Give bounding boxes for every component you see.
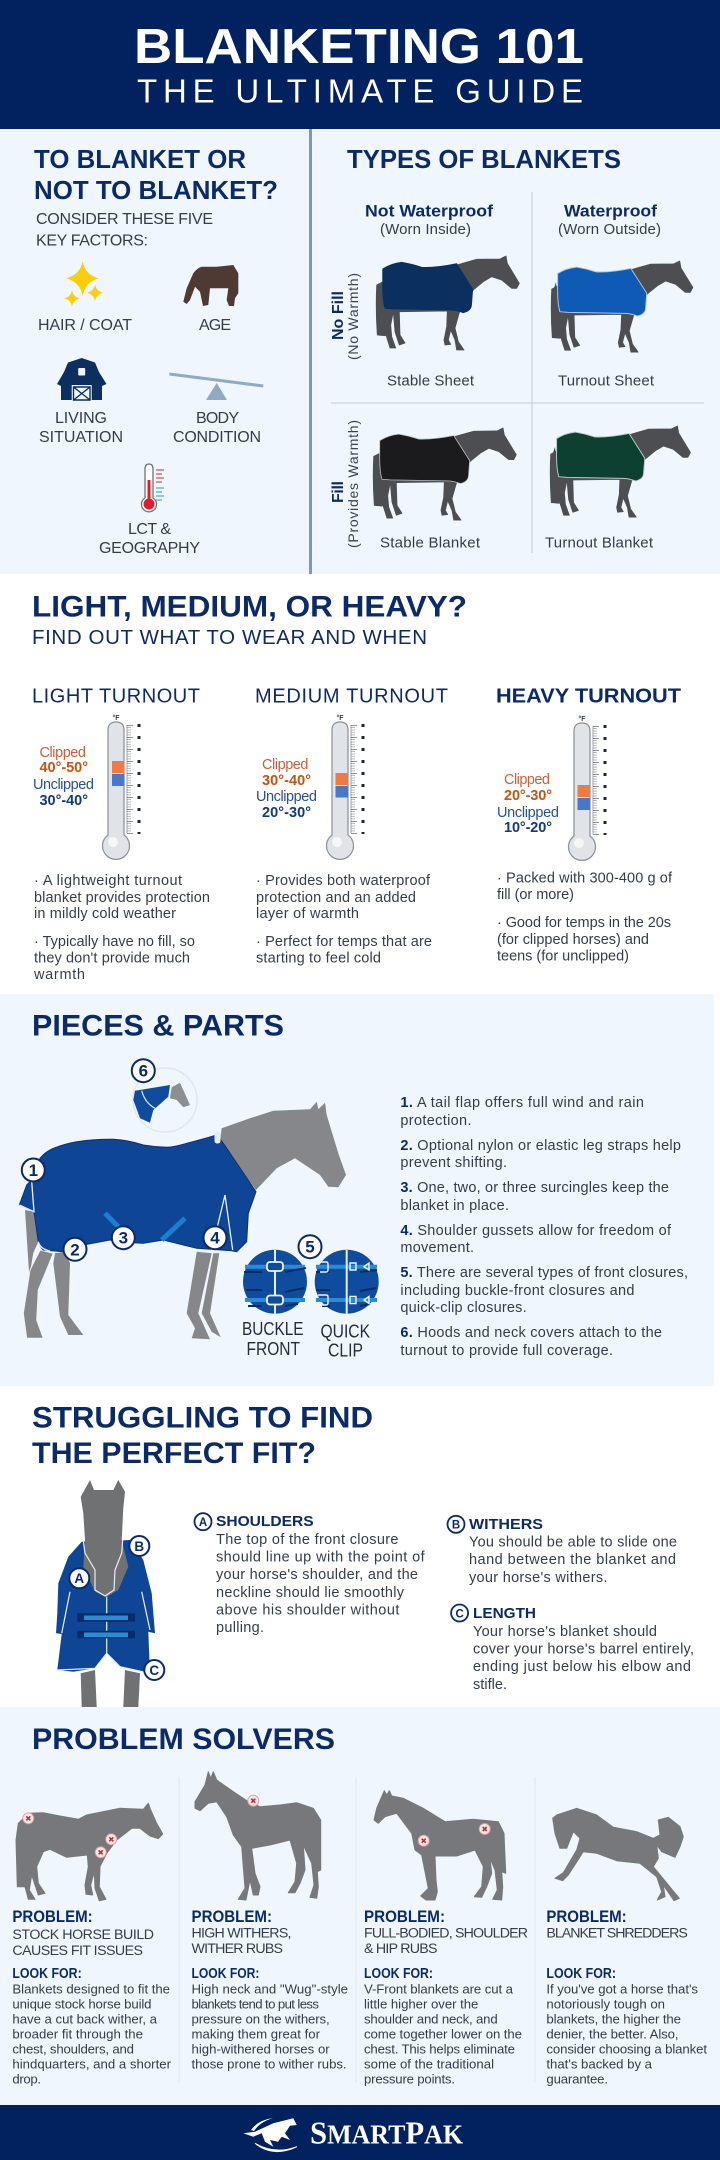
parts list: movement. xyxy=(400,1240,474,1256)
problem: high withers: High neck and "Wug"-style xyxy=(192,1981,348,1996)
fit tip: shoulders: A xyxy=(199,1517,207,1529)
column: heavy turnout: HEAVY TURNOUT xyxy=(496,686,681,708)
column label: waterproof xyxy=(558,202,661,238)
problem: stock horse build: LOOK FOR: xyxy=(12,1966,82,1982)
heading: to blanket or not to blanket: NOT TO BLANKET? xyxy=(34,175,278,205)
problem: blanket shredders: BLANKET SHREDDERS xyxy=(546,1926,688,1942)
problem: high withers: LOOK FOR: xyxy=(192,1966,259,1982)
thermometer: medium xyxy=(326,714,363,859)
problem: full-bodied: come together lower on the xyxy=(364,2026,522,2041)
column: medium turnout xyxy=(255,686,448,967)
horse front view xyxy=(56,1480,155,1707)
callout digits: 5 xyxy=(305,1238,315,1257)
factor: LCT and geography xyxy=(99,464,200,557)
horse: green blanket xyxy=(550,426,690,517)
horse silhouette: stock horse with markers xyxy=(16,1803,163,1901)
notes: heavy: fill (or more) xyxy=(497,887,574,903)
notes: medium: starting to feel cold xyxy=(256,951,381,967)
notes: light: they don't provide much xyxy=(34,951,190,967)
temperatures: light: Unclipped xyxy=(33,777,94,793)
problem: stock horse build xyxy=(12,1803,172,2086)
problem: stock horse build: STOCK HORSE BUILD xyxy=(12,1927,154,1943)
closure: buckle front xyxy=(242,1250,307,1359)
hood inset xyxy=(133,1068,197,1132)
temperatures: medium: Unclipped xyxy=(256,789,317,805)
parts list: 3. One, two, or three surcingles keep the xyxy=(400,1180,669,1196)
closure: buckle front: BUCKLE xyxy=(242,1319,304,1339)
heading: light medium heavy xyxy=(32,590,467,649)
problem: blanket shredders: blankets, the higher the xyxy=(546,2011,681,2026)
callout letters on horse: B xyxy=(134,1539,144,1554)
fit tip: length xyxy=(451,1604,694,1693)
notes: heavy xyxy=(497,871,673,965)
parts list: 2. Optional nylon or elastic leg straps help xyxy=(400,1138,681,1154)
fit tip: shoulders xyxy=(194,1513,426,1636)
title: BLANKETING 101 xyxy=(134,20,584,74)
heading: to blanket or not to blanket xyxy=(34,144,278,205)
turnout sheet: Turnout Sheet xyxy=(558,372,655,390)
panel: problem solvers xyxy=(0,1707,720,2105)
fit tip: withers xyxy=(448,1516,677,1586)
horse: blue sheet xyxy=(551,261,693,352)
fit tip: shoulders: neckline should lie smoothly xyxy=(216,1585,405,1601)
panel: types of blankets xyxy=(309,129,720,574)
factor: age xyxy=(183,265,238,334)
notes: heavy: (for clipped horses) and xyxy=(497,932,649,948)
fit tip: length: stifle. xyxy=(473,1677,507,1693)
heading: struggling to find the perfect fit: STRUGGLING TO FIND xyxy=(32,1402,373,1434)
problem: high withers: making them great for xyxy=(192,2026,321,2041)
fit tip: withers: B xyxy=(452,1520,460,1532)
problem: stock horse build: have a cut back wither, a xyxy=(12,2011,158,2026)
row label: fill: Fill xyxy=(330,481,347,503)
callout digits: 3 xyxy=(119,1229,128,1248)
temperatures: medium: 30°-40° xyxy=(262,773,311,789)
temperatures: light: 40°-50° xyxy=(40,760,88,776)
logo: wordmark: SMARTPAK xyxy=(310,2114,463,2150)
subtitle: THE ULTIMATE GUIDE xyxy=(137,72,583,110)
column: light turnout xyxy=(32,686,210,983)
horse silhouette: full-bodied with markers xyxy=(374,1791,506,1900)
fit tip: withers: You should be able to slide one xyxy=(469,1535,677,1551)
temperatures: heavy: Unclipped xyxy=(497,805,559,821)
heading: light medium heavy: LIGHT, MEDIUM, OR HEAVY? xyxy=(32,590,467,624)
temperatures: heavy xyxy=(497,772,559,836)
horse silhouette: high withers with marker xyxy=(195,1772,321,1900)
icon: grazing horse xyxy=(183,265,238,306)
fit tip: withers: your horse's withers. xyxy=(469,1570,607,1586)
notes: light: in mildly cold weather xyxy=(34,906,176,922)
callout digits: 2 xyxy=(70,1240,80,1259)
panel: pieces and parts xyxy=(0,994,714,1386)
problem: full-bodied xyxy=(364,1791,528,2086)
fit tip: length: cover your horse's barrel entirely, xyxy=(473,1642,694,1658)
fit tip: shoulders: above his shoulder without xyxy=(216,1603,399,1619)
temperatures: heavy: 20°-30° xyxy=(504,788,552,804)
row label: fill xyxy=(330,420,361,548)
stable sheet: Stable Sheet xyxy=(387,372,475,390)
closure: quick clip xyxy=(315,1250,379,1361)
parts list: prevent shifting. xyxy=(400,1155,507,1171)
factor: hair and coat xyxy=(38,261,132,334)
parts list: 1. A tail flap offers full wind and rain xyxy=(400,1095,644,1111)
problem: stock horse build: PROBLEM: xyxy=(12,1908,93,1926)
temperatures: heavy: Clipped xyxy=(504,772,550,788)
closure: buckle front: FRONT xyxy=(246,1339,300,1359)
problem: stock horse build: drop. xyxy=(12,2071,41,2086)
problem: full-bodied: V-Front blankets are cut a xyxy=(364,1981,514,1996)
panel: perfect fit xyxy=(0,1386,720,1707)
factor: LCT and geography: GEOGRAPHY xyxy=(99,540,200,557)
horse diagram with turnout xyxy=(19,1068,346,1339)
thermometer: heavy: °F xyxy=(578,715,586,723)
parts list: 5. There are several types of front closures, xyxy=(400,1265,688,1281)
stable blanket: Stable Blanket xyxy=(380,534,481,552)
problem: full-bodied: LOOK FOR: xyxy=(364,1966,433,1982)
horse legs xyxy=(81,1670,140,1707)
heading: pieces and parts: PIECES & PARTS xyxy=(32,1010,284,1042)
blanket body xyxy=(19,1135,256,1252)
heading: struggling to find the perfect fit xyxy=(32,1402,373,1470)
temperatures: light: 30°-40° xyxy=(40,793,88,809)
notes: heavy: · Good for temps in the 20s xyxy=(497,915,671,931)
fit tip: length: LENGTH xyxy=(473,1605,536,1622)
panel: light medium or heavy xyxy=(0,574,720,994)
callout digits: 6 xyxy=(139,1062,148,1081)
parts list: protection. xyxy=(400,1113,472,1129)
turnout blanket: Turnout Blanket xyxy=(545,534,654,552)
icon: barn xyxy=(57,358,106,400)
notes: medium: layer of warmth xyxy=(256,906,359,922)
fit tip: shoulders: pulling. xyxy=(216,1620,264,1636)
row label: fill: (Provides Warmth) xyxy=(345,420,361,548)
notes: medium xyxy=(256,873,432,967)
icon: thermometer xyxy=(142,464,164,512)
fit tip: shoulders: your horse's shoulder, and the xyxy=(216,1567,418,1583)
factor: age: AGE xyxy=(199,317,231,334)
fit tip: shoulders: SHOULDERS xyxy=(216,1513,314,1530)
notes: heavy: teens (for unclipped) xyxy=(497,949,629,965)
fit tip: withers: hand between the blanket and xyxy=(469,1552,676,1568)
turnout sheet xyxy=(551,261,693,390)
footer xyxy=(0,2105,720,2160)
column: light turnout: LIGHT TURNOUT xyxy=(32,686,200,708)
stable blanket xyxy=(373,428,516,552)
stable sheet xyxy=(376,256,519,390)
turnout blanket xyxy=(545,426,690,552)
subheading: five key factors: KEY FACTORS: xyxy=(36,232,148,250)
fit tip: length: C xyxy=(455,1608,464,1620)
problem: full-bodied: PROBLEM: xyxy=(364,1908,445,1926)
header banner xyxy=(0,0,720,129)
problem: full-bodied: some of the traditional xyxy=(364,2056,494,2071)
horse silhouette: bucking horse xyxy=(553,1808,683,1901)
subheading: five key factors xyxy=(36,211,213,250)
problem: blanket shredders: that's backed by a xyxy=(546,2056,653,2071)
temperatures: medium xyxy=(256,757,317,821)
problem: high withers: blankets tend to put less xyxy=(192,1996,319,2011)
temperatures: light xyxy=(33,745,94,809)
row label: no fill xyxy=(330,273,361,360)
parts list: blanket in place. xyxy=(400,1198,509,1214)
factor: body condition: BODY xyxy=(196,410,239,427)
factor: living situation: LIVING xyxy=(55,410,107,427)
factor: body condition xyxy=(169,374,263,446)
fit tip: length: ending just below his elbow and xyxy=(473,1659,691,1675)
horse legs and head xyxy=(23,1102,346,1339)
callout letters on horse: C xyxy=(149,1663,159,1678)
parts list: 4. Shoulder gussets allow for freedom of xyxy=(400,1223,672,1239)
problem: blanket shredders: PROBLEM: xyxy=(546,1908,627,1926)
callout digits xyxy=(29,1062,315,1259)
factor: living situation: SITUATION xyxy=(39,429,123,446)
fit tip: withers: WITHERS xyxy=(469,1516,543,1533)
callout digits: 1 xyxy=(29,1161,38,1180)
blanket front xyxy=(56,1540,155,1673)
heading: light medium heavy: FIND OUT WHAT TO WEAR AND WHEN xyxy=(32,626,427,649)
problem: full-bodied: pressure points. xyxy=(364,2071,455,2086)
problem: full-bodied: chest. This helps eliminate xyxy=(364,2041,515,2056)
column: medium turnout: MEDIUM TURNOUT xyxy=(255,686,448,708)
temperatures: medium: 20°-30° xyxy=(262,805,311,821)
heading: struggling to find the perfect fit: THE PERFECT FIT? xyxy=(32,1437,316,1470)
problem: high withers: HIGH WITHERS, xyxy=(192,1926,292,1942)
fit tip: shoulders: should line up with the point of xyxy=(216,1550,426,1566)
subheading: five key factors: CONSIDER THESE FIVE xyxy=(36,211,213,228)
factor: LCT and geography: LCT & xyxy=(128,521,171,538)
heading: to blanket or not to blanket: TO BLANKET OR xyxy=(34,144,246,174)
parts list: 6. Hoods and neck covers attach to the xyxy=(400,1325,662,1341)
problem: stock horse build: chest, shoulders, and xyxy=(12,2041,134,2056)
notes: light: warmth xyxy=(33,967,85,983)
notes: medium: · Perfect for temps that are xyxy=(256,934,432,950)
heading: problem solvers: PROBLEM SOLVERS xyxy=(32,1723,335,1756)
problem: full-bodied: shoulder and neck, and xyxy=(364,2011,498,2026)
icon: sparkles xyxy=(64,261,103,307)
column label: not waterproof: (Worn Inside) xyxy=(380,221,471,238)
callout letters on horse: A xyxy=(74,1571,84,1586)
horse head xyxy=(81,1480,128,1597)
factor: body condition: CONDITION xyxy=(173,429,261,446)
problem: full-bodied: & HIP RUBS xyxy=(364,1941,438,1957)
icon: seesaw xyxy=(169,374,263,400)
temperatures: medium: Clipped xyxy=(262,757,308,773)
temperatures: light: Clipped xyxy=(40,745,86,761)
parts list xyxy=(400,1095,688,1359)
problem: full-bodied: FULL-BODIED, SHOULDER xyxy=(364,1926,528,1942)
problem: blanket shredders: consider choosing a blanket xyxy=(546,2041,707,2056)
notes: light: blanket provides protection xyxy=(34,890,210,906)
closure: quick clip: CLIP xyxy=(328,1341,363,1361)
thermometer: light xyxy=(102,714,139,859)
problem: blanket shredders: If you've got a horse that's xyxy=(546,1981,698,1996)
notes: medium: protection and an added xyxy=(256,890,416,906)
problem: blanket shredders: LOOK FOR: xyxy=(546,1966,616,1982)
problem: full-bodied: little higher over the xyxy=(364,1996,478,2011)
notes: light xyxy=(33,873,210,983)
problem: blanket shredders: guarantee. xyxy=(546,2071,608,2086)
callout letters on horse xyxy=(69,1536,164,1680)
notes: heavy: · Packed with 300-400 g of xyxy=(497,871,673,887)
factor: living situation xyxy=(39,358,123,446)
notes: light: · Typically have no fill, so xyxy=(34,934,195,950)
factor: hair and coat: HAIR / COAT xyxy=(38,317,132,334)
notes: medium: · Provides both waterproof xyxy=(256,873,431,889)
problem: blanket shredders xyxy=(546,1808,707,2086)
callout numbers xyxy=(22,1059,322,1261)
horse: navy sheet xyxy=(376,256,519,350)
problem: high withers: those prone to wither rubs. xyxy=(192,2056,347,2071)
problem: blanket shredders: denier, the better. Also, xyxy=(546,2026,679,2041)
problem: stock horse build: unique stock horse build xyxy=(12,1996,152,2011)
row label: no fill: No Fill xyxy=(330,291,347,340)
column label: waterproof: (Worn Outside) xyxy=(558,221,661,238)
thermometer: medium: °F xyxy=(336,714,344,722)
problem: stock horse build: CAUSES FIT ISSUES xyxy=(12,1943,143,1959)
problem: stock horse build: Blankets designed to fit the xyxy=(12,1981,170,1996)
notes: light: · A lightweight turnout xyxy=(34,873,182,889)
problem: stock horse build: hindquarters, and a shorter xyxy=(12,2056,172,2071)
fit tip: shoulders: The top of the front closure xyxy=(216,1532,398,1548)
problem: high withers xyxy=(192,1772,348,2071)
logo: galloping horse xyxy=(243,2118,297,2152)
column label: not waterproof: Not Waterproof xyxy=(365,202,493,220)
closure: quick clip: QUICK xyxy=(320,1322,370,1342)
column label: not waterproof xyxy=(365,202,493,238)
thermometer: heavy xyxy=(568,715,605,860)
problem: high withers: WITHER RUBS xyxy=(192,1941,283,1957)
horse: black blanket xyxy=(373,428,516,520)
problem: high withers: PROBLEM: xyxy=(192,1908,272,1926)
problem: high withers: pressure on the withers, xyxy=(192,2011,330,2026)
column label: waterproof: Waterproof xyxy=(564,202,657,220)
thermometer: light: °F xyxy=(112,714,120,722)
parts list: turnout to provide full coverage. xyxy=(400,1343,613,1359)
temperatures: heavy: 10°-20° xyxy=(504,820,552,836)
callout digits: 4 xyxy=(210,1229,220,1248)
column: heavy turnout xyxy=(496,686,681,965)
fit tip: length: Your horse's blanket should xyxy=(473,1624,657,1640)
heading: types of blankets: TYPES OF BLANKETS xyxy=(347,144,621,174)
parts list: quick-clip closures. xyxy=(400,1300,527,1316)
problem: stock horse build: broader fit through the xyxy=(12,2026,143,2041)
parts list: including buckle-front closures and xyxy=(400,1283,634,1299)
problem: blanket shredders: notoriously tough on xyxy=(546,1996,665,2011)
row label: no fill: (No Warmth) xyxy=(345,273,361,360)
problem: high withers: high-withered horses or xyxy=(192,2041,330,2056)
panel: to blanket or not xyxy=(0,129,310,574)
